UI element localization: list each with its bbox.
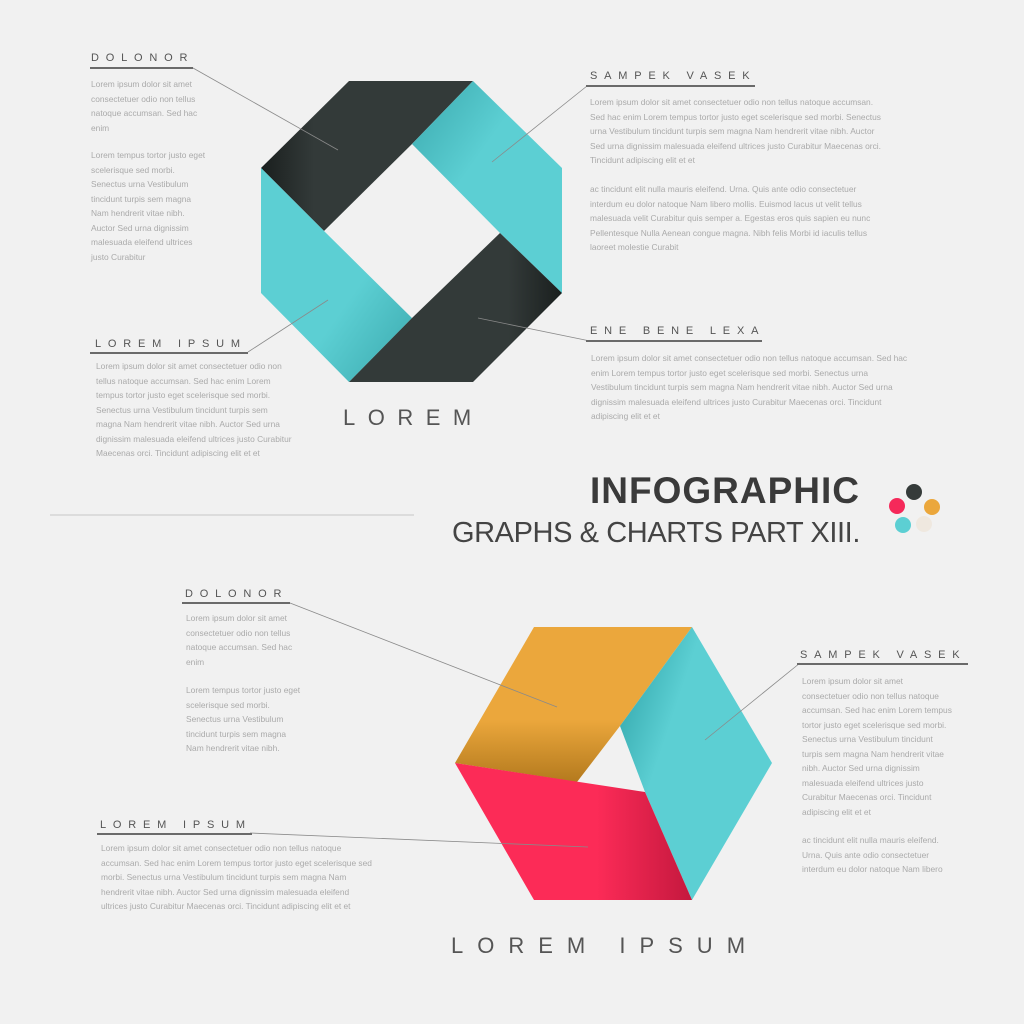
text block: ene bene lexa — [586, 325, 907, 421]
text block: bottom lorem ipsum: accumsan. Sed hac enim Lorem tempus tortor justo eget scelerisque sed — [101, 858, 372, 868]
text block: top lorem ipsum: Senectus urna Vestibulum tincidunt turpis sem — [96, 404, 268, 414]
text block: bottom dolonor: DOLONOR — [185, 588, 288, 600]
divider — [50, 514, 414, 516]
text block: bottom lorem ipsum: morbi. Senectus urna Vestibulum tincidunt turpis sem magna Nam — [101, 872, 346, 882]
text block: top lorem ipsum: LOREM IPSUM — [95, 338, 247, 350]
text block: bottom lorem ipsum: LOREM IPSUM — [100, 819, 252, 831]
text block: bottom sampek vasek: interdum eu dolor natoque Nam libero — [802, 864, 943, 874]
text block: top dolonor: Senectus urna Vestibulum — [91, 179, 188, 189]
text block: top dolonor: Nam hendrerit vitae nibh. — [91, 208, 185, 218]
text block: bottom dolonor: Lorem ipsum dolor sit amet — [186, 613, 287, 623]
text block: top dolonor: scelerisque sed morbi. — [91, 164, 175, 174]
text block: bottom sampek vasek: Curabitur Maecenas orci. Tincidunt — [802, 792, 931, 802]
text block: bottom dolonor: scelerisque sed morbi. — [186, 700, 270, 710]
text block: top sampek vasek: Sed hac enim Lorem tempus tortor justo eget scelerisque sed morbi. Senectus — [590, 112, 881, 122]
text block: top sampek vasek: ac tincidunt elit nulla mauris eleifend. Urna. Quis ante odio consectetuer — [590, 184, 856, 194]
chart: hexagon — [455, 627, 772, 900]
text block: top dolonor: Lorem tempus tortor justo eget — [91, 150, 205, 160]
text block: ene bene lexa: dignissim malesuada eleifend ultrices justo Curabitur Maecenas orci. Tincidunt — [591, 396, 881, 406]
text block: bottom sampek vasek: Lorem ipsum dolor sit amet — [802, 676, 903, 686]
text block: bottom sampek vasek: adipiscing elit et et — [802, 806, 871, 816]
text block: top lorem ipsum: magna Nam hendrerit vitae nibh. Auctor Sed urna — [96, 419, 280, 429]
label: LOREM IPSUM: LOREM IPSUM — [451, 933, 759, 958]
text block: ene bene lexa: Vestibulum tincidunt turpis sem magna Nam hendrerit vitae nibh. Auctor Sed urna — [591, 382, 893, 392]
text block: top sampek vasek: malesuada velit Curabitur quis semper a. Egestas eros quis sapien eu nunc — [590, 213, 870, 223]
text block: bottom sampek vasek: nibh. Auctor Sed urna dignissim — [802, 763, 920, 773]
text block: top sampek vasek: interdum eu dolor natoque Nam libero mollis. Euismod lacus ut velit tellus — [590, 198, 862, 208]
title: INFOGRAPHIC — [590, 470, 860, 511]
text block: bottom sampek vasek: Senectus urna Vestibulum tincidunt — [802, 734, 933, 744]
text block: top dolonor: Auctor Sed urna dignissim — [91, 222, 189, 232]
text block: top dolonor: tincidunt turpis sem magna — [91, 194, 191, 204]
text block: bottom dolonor — [182, 588, 300, 753]
text block: top sampek vasek: SAMPEK VASEK — [590, 70, 756, 82]
text block: ene bene lexa: adipiscing elit et et — [591, 411, 660, 421]
text block: top dolonor: justo Curabitur — [91, 252, 145, 262]
text block: top lorem ipsum: tempus tortor justo eget scelerisque sed morbi. — [96, 390, 270, 400]
text block: top dolonor: Lorem ipsum dolor sit amet — [91, 79, 192, 89]
text block: bottom sampek vasek: SAMPEK VASEK — [800, 649, 966, 661]
text block: top dolonor: consectetuer odio non tellus — [91, 94, 195, 104]
label: LOREM: LOREM — [343, 405, 484, 430]
text block: top dolonor: enim — [91, 122, 109, 132]
text block: bottom dolonor: tincidunt turpis sem magna — [186, 728, 286, 738]
text block: top sampek vasek: Pellentesque Nulla Aenean congue magna. Nibh felis Morbi id iaculis tellus — [590, 228, 867, 238]
chart: octagon — [261, 81, 562, 382]
text block: top sampek vasek — [586, 70, 881, 252]
text block: top dolonor: malesuada eleifend ultrices — [91, 237, 192, 247]
text block: top sampek vasek: laoreet molestie Curabit — [590, 242, 678, 252]
text block: top dolonor — [90, 52, 205, 262]
text block: bottom lorem ipsum: Lorem ipsum dolor sit amet consectetuer odio non tellus natoque — [101, 843, 341, 853]
text block: top sampek vasek: Lorem ipsum dolor sit amet consectetuer odio non tellus natoque accumsan. — [590, 97, 873, 107]
text block: bottom lorem ipsum — [97, 819, 372, 911]
text block: top sampek vasek: urna Vestibulum tincidunt turpis sem magna Nam hendrerit vitae nibh. Auctor — [590, 126, 874, 136]
text block: top lorem ipsum: tellus natoque accumsan. Sed hac enim Lorem — [96, 376, 271, 386]
title: GRAPHS & CHARTS PART XIII. — [452, 517, 860, 549]
text block: bottom sampek vasek — [797, 649, 968, 874]
text block: top lorem ipsum: dignissim malesuada eleifend ultrices justo Curabitur — [96, 434, 292, 444]
text block: ene bene lexa: enim Lorem tempus tortor justo eget scelerisque sed morbi. Senectus urna — [591, 368, 868, 378]
text block: bottom dolonor: natoque accumsan. Sed hac — [186, 642, 292, 652]
text block: bottom sampek vasek: consectetuer odio non tellus natoque — [802, 690, 939, 700]
text block: bottom sampek vasek: malesuada eleifend ultrices justo — [802, 778, 924, 788]
text block: bottom dolonor: Lorem tempus tortor justo eget — [186, 685, 300, 695]
text block: bottom sampek vasek: turpis sem magna Nam hendrerit vitae — [802, 748, 944, 758]
text block: top lorem ipsum: Maecenas orci. Tincidunt adipiscing elit et et — [96, 448, 260, 458]
text block: top dolonor: DOLONOR — [91, 52, 194, 64]
text block: bottom sampek vasek: ac tincidunt elit nulla mauris eleifend. — [802, 835, 939, 845]
text block: bottom dolonor: consectetuer odio non tellus — [186, 628, 290, 638]
text block: bottom dolonor: Nam hendrerit vitae nibh. — [186, 743, 280, 753]
text block: bottom sampek vasek: tortor justo eget scelerisque sed morbi. — [802, 720, 946, 730]
text block: bottom lorem ipsum: ultrices justo Curabitur Maecenas orci. Tincidunt adipiscing elit et et — [101, 901, 351, 911]
text block: top lorem ipsum — [90, 338, 292, 458]
text block: bottom lorem ipsum: hendrerit vitae nibh. Auctor Sed urna dignissim malesuada eleifend — [101, 886, 349, 896]
text block: bottom sampek vasek: accumsan. Sed hac enim Lorem tempus — [802, 705, 952, 715]
text block: ene bene lexa: Lorem ipsum dolor sit amet consectetuer odio non tellus natoque accumsan. Sed hac — [591, 353, 907, 363]
text block: bottom sampek vasek: Urna. Quis ante odio consectetuer — [802, 850, 929, 860]
text block: ene bene lexa: ENE BENE LEXA — [590, 325, 765, 337]
text block: top sampek vasek: Sed urna dignissim malesuada eleifend ultrices justo Curabitur Maecenas orci. — [590, 140, 881, 150]
text block: bottom dolonor: enim — [186, 656, 204, 666]
text block: top dolonor: natoque accumsan. Sed hac — [91, 108, 197, 118]
text block: bottom dolonor: Senectus urna Vestibulum — [186, 714, 283, 724]
title — [452, 470, 860, 549]
icon: colored dots — [889, 484, 940, 533]
text block: top lorem ipsum: Lorem ipsum dolor sit amet consectetuer odio non — [96, 361, 282, 371]
leader lines — [193, 68, 800, 847]
text block: top sampek vasek: Tincidunt adipiscing elit et et — [590, 155, 695, 165]
